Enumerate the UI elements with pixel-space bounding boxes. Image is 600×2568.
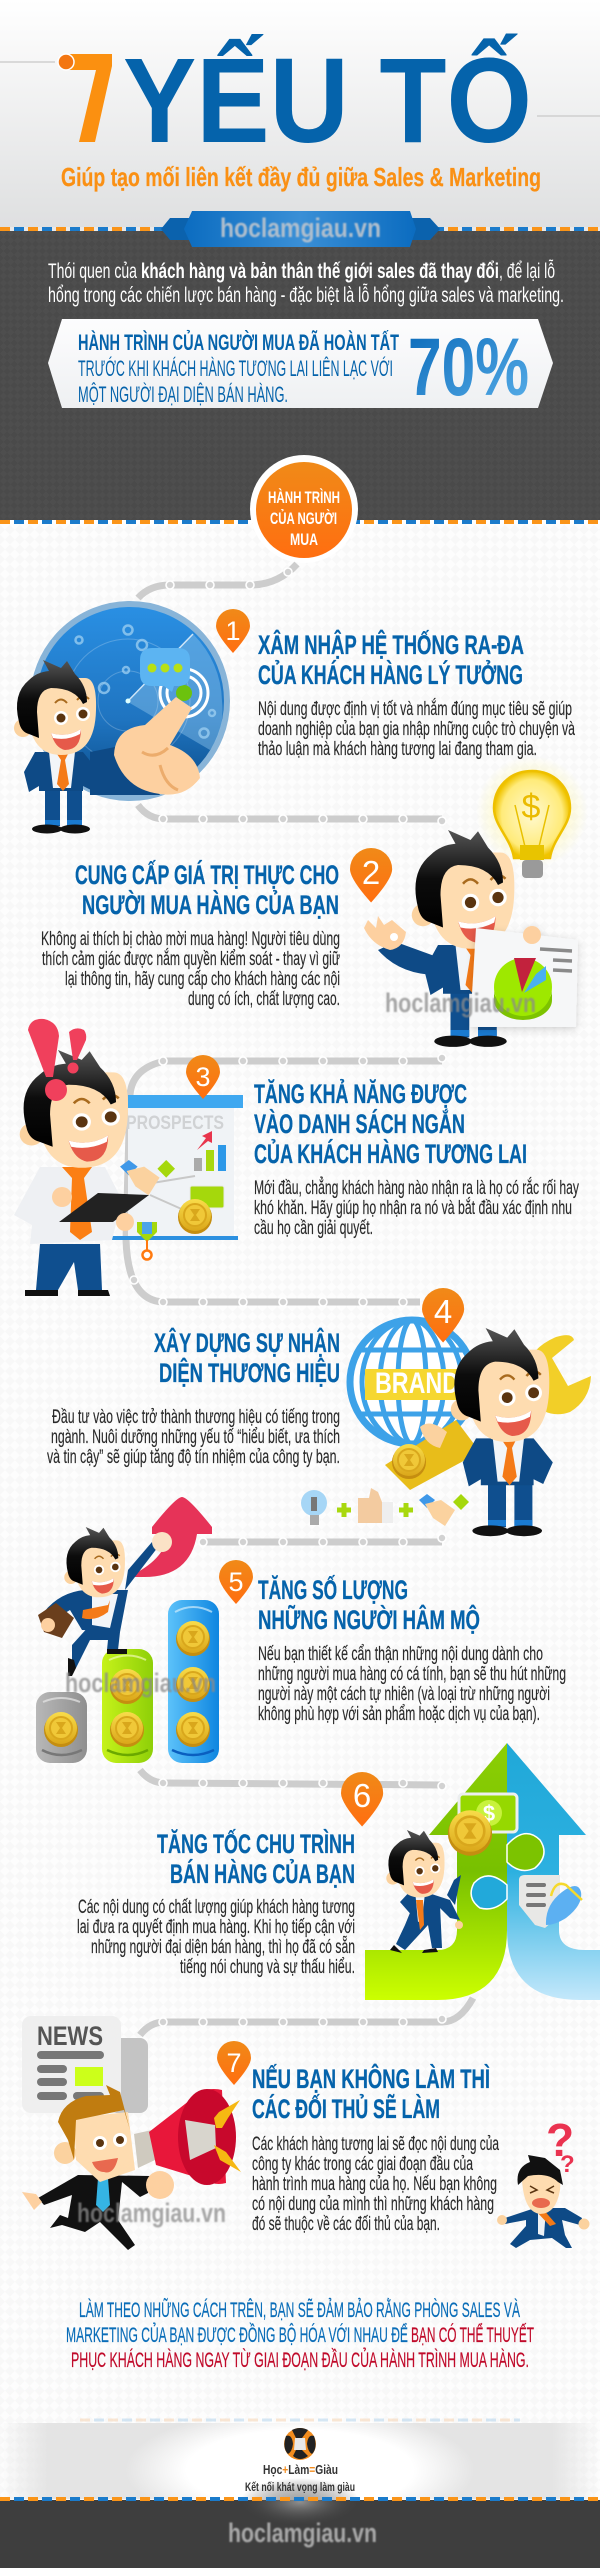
path markers [130,568,446,2026]
pointing hand [90,697,200,795]
board [100,1095,243,1260]
pin 6: 6 [353,1777,371,1814]
journey badge: HÀNH TRÌNH [268,488,340,507]
man [14,660,99,834]
pin 2: 2 [362,854,380,891]
header background [0,0,600,230]
man shouting [22,2085,174,2250]
icon: thumbs up [358,1488,393,1523]
text 7 [252,2134,499,2235]
text 7: đó sẽ thuộc về các đối thủ của bạn. [252,2214,440,2235]
board: PROSPECTS [126,1113,224,1134]
globe: BRAND [375,1367,459,1400]
intro paragraph: , để lại lỗ [499,260,555,283]
pin 7: 7 [226,2048,242,2078]
pin 7 [217,2041,251,2085]
icon: bulb [301,1490,327,1525]
heading 3: VÀO DANH SÁCH NGẮN [254,1108,465,1139]
step 1 illustration: radar and man [14,604,227,834]
pin 4: 4 [434,1293,452,1330]
heading 6: TĂNG TỐC CHU TRÌNH [157,1827,355,1859]
logo text: Học+Làm=Giàu [263,2462,338,2477]
heading 1 [258,628,524,690]
text 6: tiếng nói chung và sự thấu hiểu. [180,1957,355,1978]
text 2: thích cảm giác được nắm quyền kiểm soát - thay vì giữ [42,948,340,970]
text 4: Đầu tư vào việc trở thành thương hiệu có tiếng trong [52,1407,340,1428]
heading 4 [154,1327,340,1388]
money and coin: $ [483,1801,495,1826]
step 6 illustration: puzzle arrows [365,1743,600,2000]
stat text: MỘT NGƯỜI ĐẠI DIỆN BÁN HÀNG. [78,382,288,407]
pin 1 [216,609,250,653]
heading 5: NHỮNG NGƯỜI HÂM MỘ [258,1604,480,1635]
logo [284,2428,316,2460]
text 2: dung có ích, chất lượng cao. [188,989,340,1010]
man [412,830,518,1047]
stat text: HÀNH TRÌNH CỦA NGƯỜI MUA ĐÃ HOÀN TẤT [78,330,399,355]
intro paragraph [48,260,564,307]
heading 2: NGƯỜI MUA HÀNG CỦA BẠN [82,888,339,920]
pin 4 [422,1288,464,1343]
green arrow [365,1743,507,2000]
megaphone [134,2089,241,2185]
pin 5: 5 [228,1567,244,1597]
journey badge [250,455,358,563]
scared competitor with question marks: ? [560,2151,575,2178]
OK hand [364,916,440,975]
text 7: công ty khác trong các giai đoạn đầu của [252,2154,473,2175]
text 2: Không ai thích bị chào mời mua hàng! Người tiêu dùng [41,929,340,950]
step 4 illustration: brand globe and wrench [350,1320,591,1536]
jumping man [38,1527,172,1676]
radar [33,604,227,798]
scared competitor with question marks: ? [546,2114,574,2166]
journey badge: CỦA NGƯỜI [270,509,337,528]
title words: YẾU TỐ [123,32,532,168]
text 2 [41,929,340,1010]
money and coin [448,1794,517,1856]
text 3: cầu họ cần giải quyết. [254,1218,373,1239]
icon: handshake [419,1494,469,1526]
heading 4: XÂY DỰNG SỰ NHẬN [154,1327,340,1358]
heading 5 [258,1573,480,1635]
text 6: Các nội dung có chất lượng giúp khách hàng tương [78,1897,355,1918]
pin 1: 1 [225,616,241,646]
walking man [386,1830,463,1953]
heading 2: CUNG CẤP GIÁ TRỊ THỰC CHO [75,859,339,890]
pin 5 [219,1560,253,1604]
icon row: idea + like + partnership [301,1488,469,1526]
text 6: lai đưa ra quyết định mua hàng. Khi họ tiếp cận với [77,1917,355,1938]
conclusion [66,2298,534,2372]
watermark: hoclamgiau.vn [65,1668,216,1698]
columns [36,1600,219,1763]
newspaper [22,2016,148,2113]
pin 3 [186,1055,220,1099]
target and chat bubble [140,648,208,717]
heading 6: BÁN HÀNG CỦA BẠN [170,1857,355,1889]
step 7 illustration: news and megaphone [22,2016,241,2250]
exclamation marks [28,1019,86,1101]
logo text [245,2462,355,2494]
text 5 [258,1644,566,1725]
man [14,1050,149,1296]
report sheet [470,926,578,1027]
globe [350,1320,474,1444]
logo text: Kết nối khát vọng làm giàu [245,2480,355,2494]
text 1 [258,698,575,760]
man [451,1328,553,1536]
step 2 illustration: man with chart [364,830,578,1047]
text 6: những người đại diện bán hàng, thì họ đã có sẵn [91,1937,355,1958]
pin 2 [350,848,392,903]
heading 4: DIỆN THƯƠNG HIỆU [159,1357,340,1388]
text 2: lại thông tin, hãy cung cấp cho khách hàng các nội [65,969,340,990]
intro paragraph: Thói quen của [48,260,137,283]
red arrow [128,1497,212,1577]
watermark: hoclamgiau.vn [385,988,536,1018]
footer site name: hoclamgiau.vn [228,2518,377,2548]
stat box: 70% [48,319,553,413]
watermark: hoclamgiau.vn [77,2198,226,2228]
heading 7: CÁC ĐỐI THỦ SẼ LÀM [252,2092,440,2124]
page background [0,522,600,2502]
heading 6 [157,1827,355,1889]
heading 3: TĂNG KHẢ NĂNG ĐƯỢC [254,1077,467,1109]
pin 6 [341,1772,383,1827]
document and pen [519,1875,582,1928]
text 4: ngành. Nuôi dưỡng những yếu tố “hiểu biết, ưa thích [51,1427,340,1448]
text 6 [77,1897,355,1978]
footer panel [0,2408,600,2568]
heading 5: TĂNG SỐ LƯỢNG [258,1573,408,1605]
wrench [385,1335,591,1490]
heading 7: NẾU BẠN KHÔNG LÀM THÌ [252,2063,490,2094]
title [58,32,532,168]
journey badge: MUA [290,530,318,549]
blue arrow [507,1743,600,2000]
heading 7 [252,2063,490,2124]
scared competitor with question marks [497,2114,590,2248]
puzzle knobs [471,1834,544,1909]
journey path [126,564,473,2035]
stat number: 70% [408,322,529,413]
dark intro band [0,230,600,522]
step 3 illustration: presentation board [14,1019,243,1296]
stat text [78,330,399,407]
numeral 7 [58,54,112,142]
pin 3: 3 [195,1062,211,1092]
icon: dollar light bulb: $ [522,788,541,826]
text 3 [254,1177,579,1239]
ribbon: hoclamgiau.vn [161,211,440,247]
step 5 illustration: rising columns [36,1497,219,1763]
newspaper: NEWS [37,2021,103,2051]
icon: dollar light bulb [476,756,588,878]
ribbon: hoclamgiau.vn: hoclamgiau.vn [220,213,381,243]
text 4: và tin cậy” sẽ giúp tăng độ tín nhiệm của công ty bạn. [47,1447,340,1468]
heading 2 [75,859,339,920]
heading 3 [254,1077,527,1169]
text 4 [47,1407,340,1468]
